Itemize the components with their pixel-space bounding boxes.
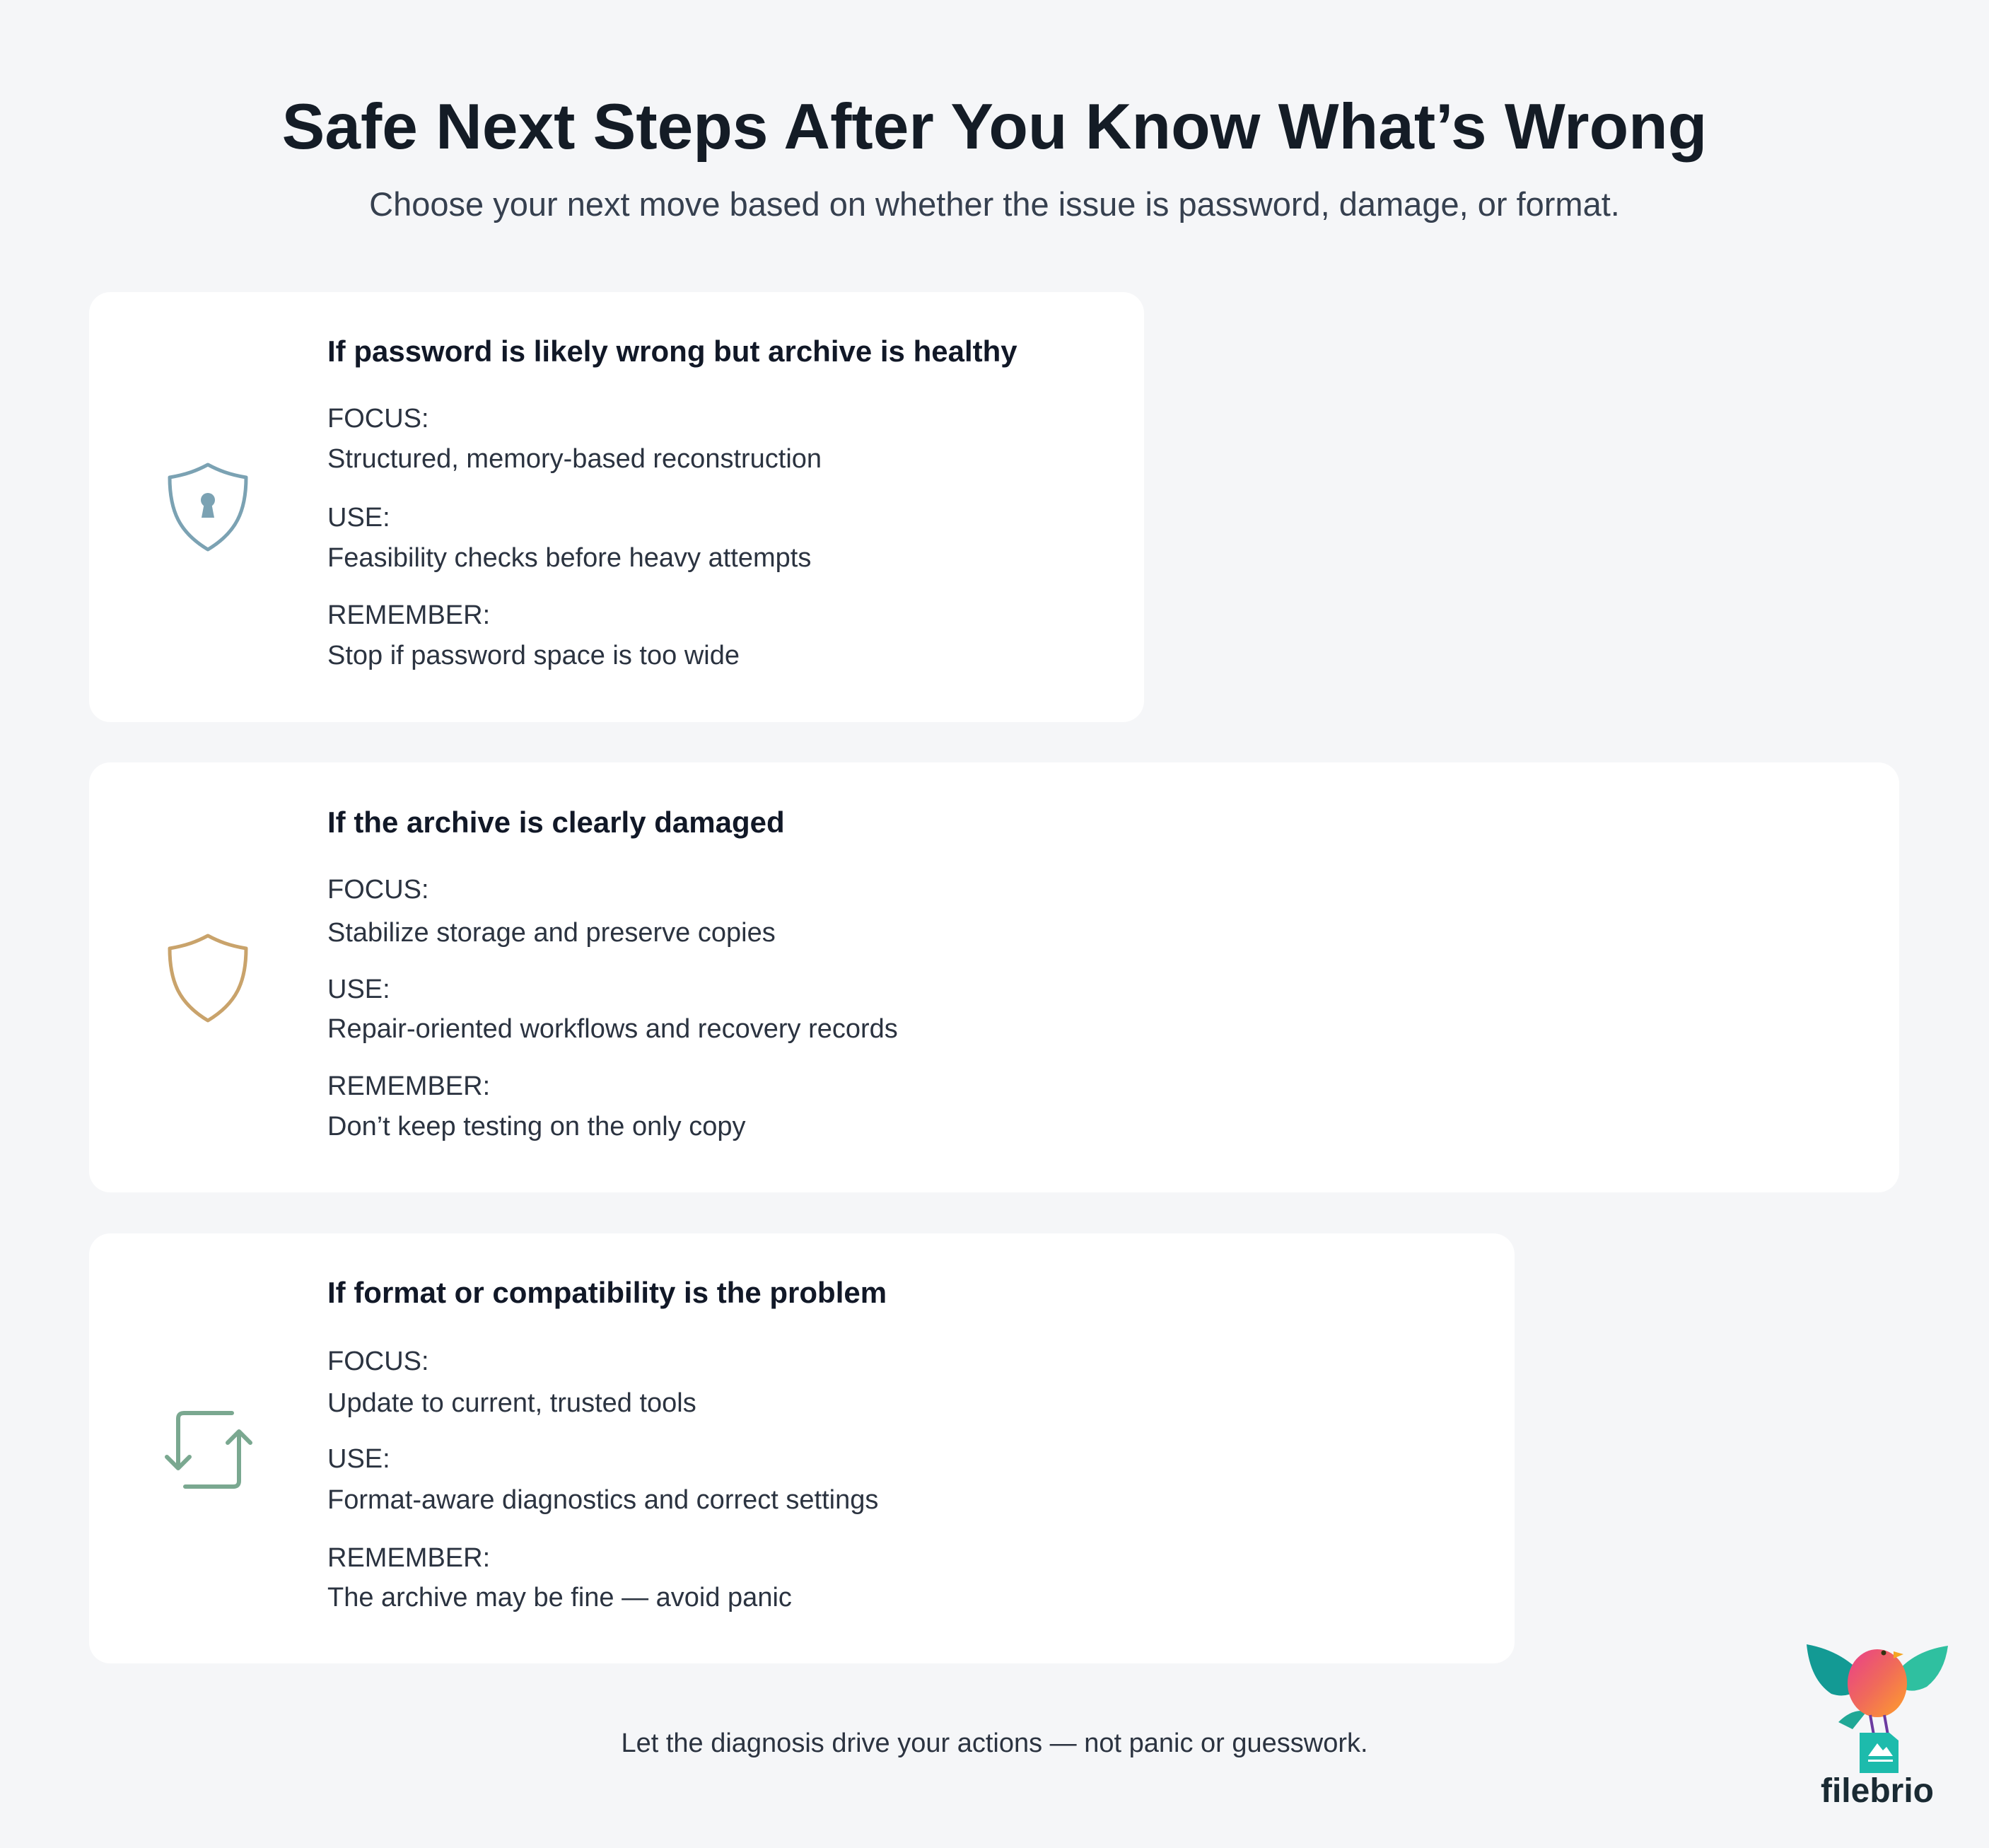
text: Structured, memory-based reconstruction xyxy=(327,444,822,474)
text: The archive may be fine — avoid panic xyxy=(327,1583,792,1612)
text: Update to current, trusted tools xyxy=(327,1388,696,1418)
footer text: Let the diagnosis drive your actions — not panic or guesswork. xyxy=(621,1728,1368,1758)
text: USE: xyxy=(327,975,390,1004)
title: Safe Next Steps After You Know What’s Wrong xyxy=(282,91,1707,163)
subtitle: Choose your next move based on whether the issue is password, damage, or format. xyxy=(369,185,1620,223)
logo: filebrio xyxy=(1807,1644,1948,1810)
text: damage details: FOCUS: xyxy=(327,875,429,905)
text: format details: FOCUS: xyxy=(327,1347,429,1376)
heading: password: If password is likely wrong but archive is healthy xyxy=(327,335,1017,368)
text: Stabilize storage and preserve copies xyxy=(327,918,776,948)
panel: damage xyxy=(89,762,1899,1192)
icon: refresh arrows xyxy=(165,1411,252,1489)
text: REMEMBER: xyxy=(327,600,490,630)
text: Stop if password space is too wide xyxy=(327,641,740,670)
icon: shield xyxy=(168,934,247,1023)
text: Feasibility checks before heavy attempts xyxy=(327,543,811,573)
panel: format xyxy=(89,1233,1515,1663)
heading: damage: If the archive is clearly damaged xyxy=(327,806,785,839)
text: Repair-oriented workflows and recovery records xyxy=(327,1014,898,1044)
text: Format-aware diagnostics and correct settings xyxy=(327,1485,878,1515)
icon: shield with keyhole xyxy=(168,463,247,552)
text: password details: FOCUS: xyxy=(327,404,429,434)
panel: password xyxy=(89,292,1144,722)
logo: filebrio: filebrio xyxy=(1821,1772,1934,1810)
text: USE: xyxy=(327,1444,390,1474)
text: REMEMBER: xyxy=(327,1071,490,1101)
text: USE: xyxy=(327,503,390,533)
heading: format: If format or compatibility is the problem xyxy=(327,1276,887,1309)
text: REMEMBER: xyxy=(327,1543,490,1573)
text: Don’t keep testing on the only copy xyxy=(327,1112,745,1141)
